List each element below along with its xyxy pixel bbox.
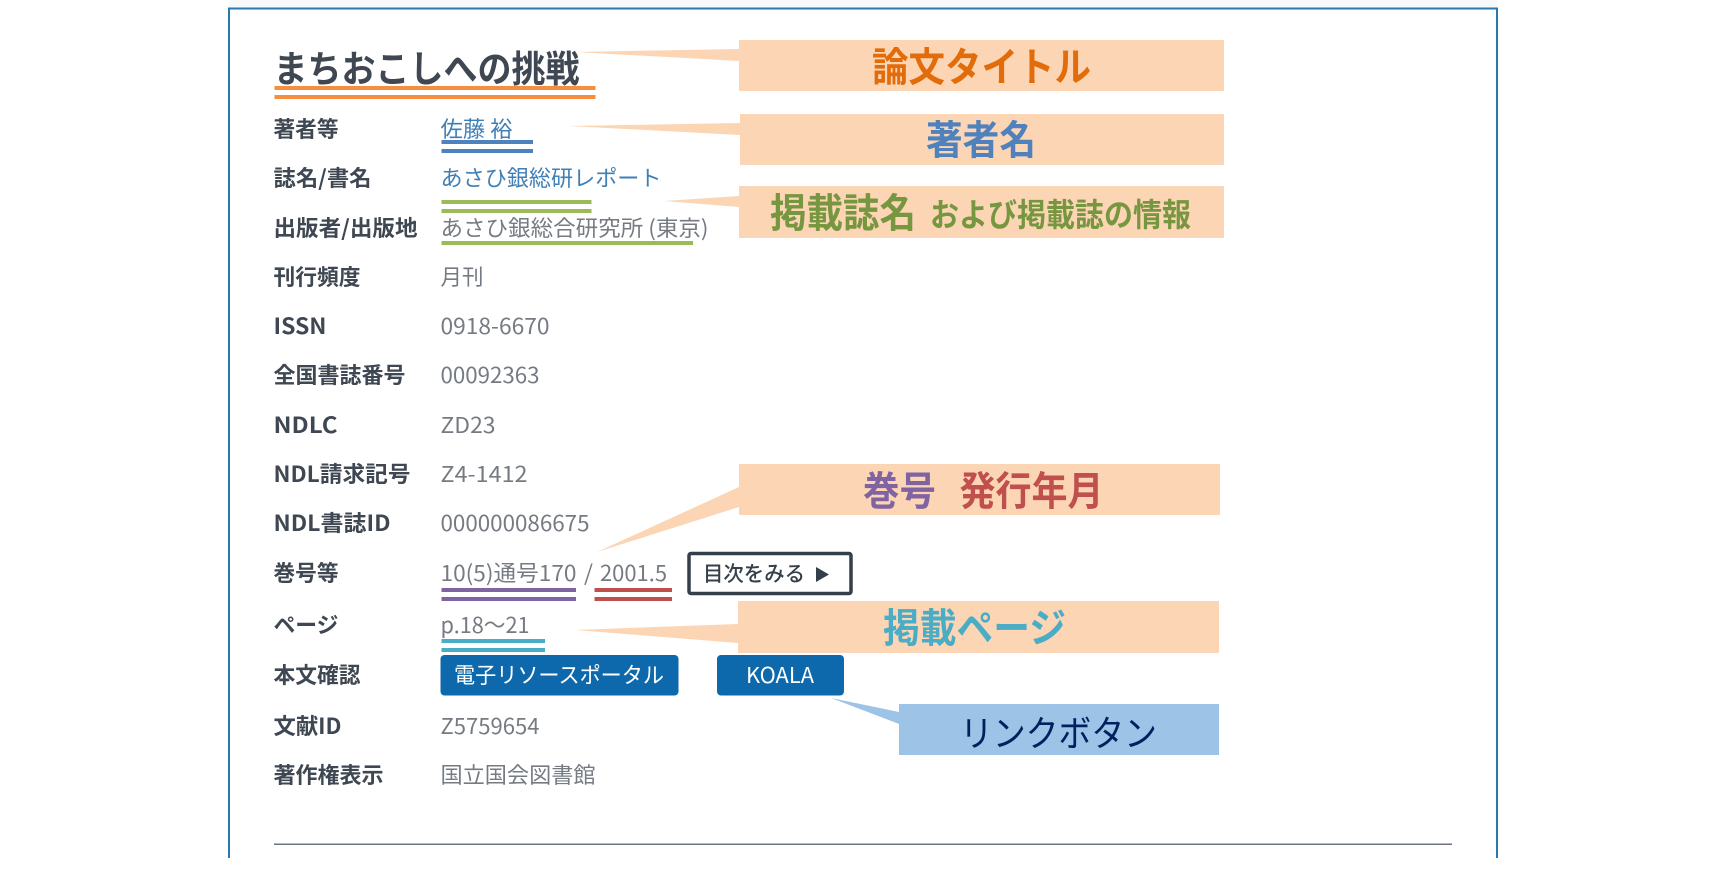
record panel frame: [229, 8, 1497, 858]
row: ISSN: [274, 309, 550, 341]
callout: journal name and information: 掲載誌名: [770, 181, 916, 239]
row: journal name: あさひ銀総研レポート: [440, 161, 662, 193]
callout: volume and publication date: 発行年月: [960, 459, 1104, 517]
button: electronic resource portal: 電子リソースポータル: [454, 658, 664, 690]
callout: volume and publication date: 巻号: [863, 459, 936, 517]
row: NDL call number: [274, 457, 528, 489]
callout: journal name and information: および掲載誌の情報: [930, 190, 1191, 236]
row: national bibliography number: 全国書誌番号: [274, 358, 406, 390]
row: publisher: [274, 211, 708, 245]
button: KOALA: [717, 655, 844, 696]
callout: author name: [568, 108, 1224, 166]
callout: article title: [575, 35, 1224, 93]
row: document ID: [274, 709, 540, 741]
row: author: 佐藤 裕: [440, 112, 512, 144]
callout: article title: 論文タイトル: [872, 35, 1091, 93]
row: author: [274, 112, 533, 153]
row: journal name: 誌名/書名: [274, 161, 372, 193]
title: まちおこしへの挑戦: [274, 39, 580, 93]
button: KOALA: KOALA: [746, 658, 815, 690]
row: document ID: 文献ID: [274, 709, 342, 741]
row: pages: p.18～21: [440, 608, 530, 640]
row: copyright: 国立国会図書館: [440, 758, 596, 790]
callout: link button: [831, 698, 1219, 757]
button: table of contents: [689, 554, 851, 594]
row: volume and issue: 2001.5: [600, 556, 667, 588]
row: pages: ページ: [274, 608, 338, 640]
row: author: 著者等: [274, 112, 338, 144]
row: NDLC: [274, 408, 496, 440]
row: full text: 本文確認: [274, 658, 360, 690]
callout: author name: 著者名: [926, 108, 1036, 166]
row: national bibliography number: 00092363: [440, 358, 540, 390]
row: NDL call number: NDL請求記号: [274, 457, 410, 489]
callout: link button: リンクボタン: [960, 705, 1157, 757]
row: frequency: 月刊: [440, 260, 484, 292]
button: table of contents: 目次をみる: [703, 558, 805, 588]
row: pages: [274, 608, 545, 652]
row: ISSN: ISSN: [274, 309, 326, 341]
row: NDL bibliographic ID: [274, 506, 590, 538]
callout: journal name and information: [664, 181, 1224, 239]
row: copyright: [274, 758, 596, 790]
row: volume and issue: /: [584, 556, 593, 588]
row: volume and issue: [274, 556, 672, 601]
row: frequency: [274, 260, 484, 292]
row: volume and issue: 10(5)通号170: [440, 556, 576, 588]
row: national bibliography number: [274, 358, 540, 390]
row: copyright: 著作権表示: [274, 758, 384, 790]
row: journal name: [274, 161, 662, 213]
callout: volume and publication date: [597, 459, 1220, 552]
row: NDLC: ZD23: [440, 408, 496, 440]
row: NDL call number: Z4-1412: [440, 457, 528, 489]
callout: page range: 掲載ページ: [883, 596, 1066, 654]
row: publisher: あさひ銀総合研究所 (東京): [440, 211, 708, 243]
row: NDL bibliographic ID: NDL書誌ID: [274, 506, 390, 538]
row: NDLC: NDLC: [274, 408, 338, 440]
row: NDL bibliographic ID: 000000086675: [440, 506, 590, 538]
row: ISSN: 0918-6670: [440, 309, 550, 341]
callout: page range: [575, 596, 1219, 654]
row: volume and issue: 巻号等: [274, 556, 338, 588]
row: publisher: 出版者/出版地: [274, 211, 418, 243]
row: frequency: 刊行頻度: [274, 260, 360, 292]
row: document ID: Z5759654: [440, 709, 540, 741]
